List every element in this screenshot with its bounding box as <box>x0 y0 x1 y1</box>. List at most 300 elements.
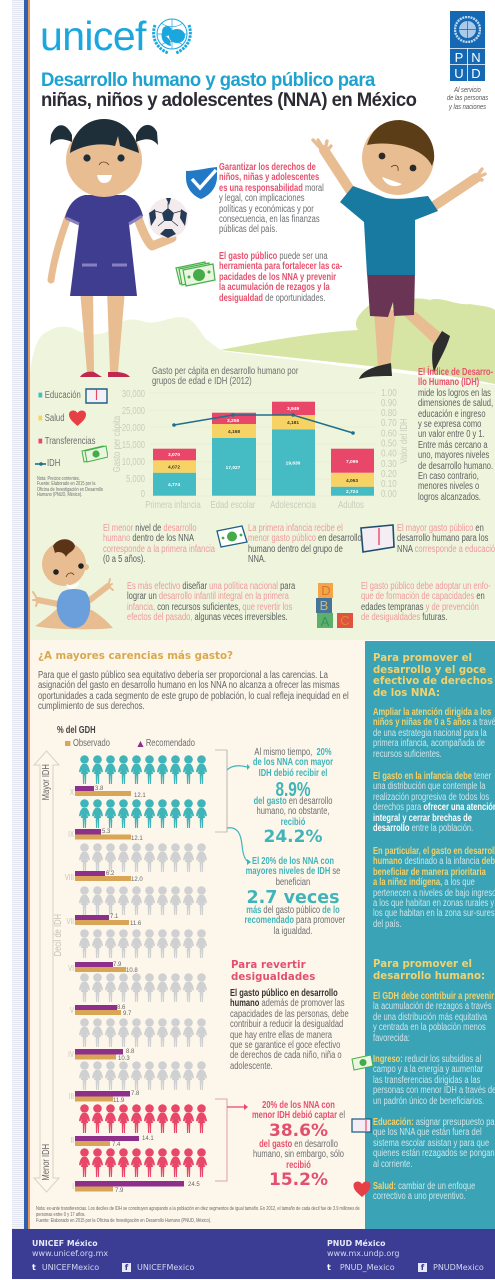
footnote: Nota: ex-ante transferencias. Los deciles de IDH se construyen agrupando a la población en diez segmentos de igual tamaño. En 2012, el tamaño de cada decil fue de 3.9 millones de <box>36 1206 360 1212</box>
text: indice de desarrollo humano: y se expresa como <box>418 419 481 430</box>
footer: unicef contact <box>32 1239 108 1259</box>
blue body <box>57 589 90 628</box>
text: gasto publico: desigualdad de oportunidades. <box>219 293 326 304</box>
callout: 20 percent high idh: IDH debió recibir el <box>259 768 327 779</box>
intro paragraph: oportunidades a cada segmento de este grupo de población, lo cual refleja inequidad en el <box>38 691 349 702</box>
text: gdh debe: favorecida: <box>373 1033 410 1044</box>
legend icon: money <box>81 445 108 463</box>
heading: promover nna <box>373 653 493 700</box>
chart legend: Recomendado <box>146 738 195 749</box>
callout: low idh: menor IDH debió captar el <box>252 1110 345 1121</box>
legend icon: book <box>85 388 108 404</box>
text: enfoque capacidades: edades tempranas y de prevención <box>361 602 479 613</box>
text: ampliar: Ampliar la atención dirigida a los <box>373 707 491 718</box>
bar values: 4,072 <box>168 464 180 470</box>
left axis labels: 0 <box>141 488 145 499</box>
callout text: recibio red: del gasto en desarrollo <box>259 1139 338 1150</box>
dress <box>65 195 143 296</box>
bar values: 24.5 <box>188 1182 200 1188</box>
text: garantizar: políticas y económicas y por <box>219 204 314 215</box>
right axis labels: 0.90 <box>381 397 397 408</box>
text: en particular: pertenecen a niveles de bajo ingreso, <box>373 888 495 899</box>
hair <box>70 119 139 153</box>
text: gdh debe: y centrada en la población menos <box>373 1022 486 1033</box>
left axis labels: 20,000 <box>122 422 145 433</box>
heading: para revertir: Para revertir <box>231 960 306 971</box>
text: ampliar: de una estrategia nacional para la <box>373 728 487 739</box>
category labels: Adultos <box>338 499 364 510</box>
footer: unicef twitter: t UNICEFMexico <box>32 1263 99 1272</box>
left axis labels: 5,000 <box>126 473 145 484</box>
text: politica nacional <box>127 581 296 623</box>
axis label: decil: Decil de IDH <box>53 914 64 956</box>
legs <box>374 310 442 367</box>
bars: adultos <box>331 449 374 496</box>
left axis labels: 25,000 <box>122 405 145 416</box>
callout: 20 percent high idh: Al mismo tiempo, 20% <box>254 747 332 758</box>
text: enfoque capacidades: que de formación de capacidades en <box>361 591 485 602</box>
stat: 15.2: 15.2% <box>269 1170 328 1190</box>
text: para revertir body: capacidades de las personas, debe <box>230 1009 349 1020</box>
right axis labels: 0.20 <box>381 468 397 479</box>
text: menor nivel: humano dentro de los NNA <box>103 533 194 544</box>
people rows <box>79 755 207 1177</box>
red bracket and arrow <box>212 1095 252 1185</box>
shoes <box>80 372 130 377</box>
pnud letters: N <box>471 50 481 65</box>
pnud letters: P <box>455 50 463 65</box>
text: educacion <box>373 1118 495 1170</box>
callout text: recibio red: humano, sin embargo, sólo <box>253 1149 344 1160</box>
baby illustration <box>32 539 114 630</box>
legend icon: heart <box>69 410 86 426</box>
text: enfoque capacidades: de desigualdades futuras. <box>361 612 447 623</box>
text: politica nacional: efectos del pasado, algunas veces irreversibles. <box>127 612 288 623</box>
heading: promover nna: de los NNA: <box>373 688 440 699</box>
icon: heart straddling panel <box>353 1181 371 1197</box>
text: menor nivel: (0 a 5 años). <box>103 554 145 565</box>
right axis labels: 0.50 <box>381 438 397 449</box>
right axis labels: 0.10 <box>381 478 397 489</box>
arms <box>324 150 476 206</box>
decile bars <box>75 786 184 1192</box>
unicef logo <box>40 13 192 59</box>
arms <box>51 212 70 280</box>
legend item: salud: ■ Salud <box>38 413 64 424</box>
text: gdh debe <box>373 992 494 1044</box>
chart note: Fuente: Elaborado en 2015 por la <box>37 481 95 487</box>
text: gdh debe: de una distribución más equitativa <box>373 1012 487 1023</box>
bar values: 10.3 <box>118 1056 130 1062</box>
right axis labels: 0.40 <box>381 448 397 459</box>
bar chart <box>111 387 409 510</box>
footnote <box>36 1207 360 1225</box>
text: en particular: a la niñez indígena, a los que <box>373 877 475 888</box>
text: menor nivel <box>103 523 215 565</box>
chart legend <box>65 738 195 749</box>
right axis labels <box>381 387 397 499</box>
intro paragraph: asignación del gasto en desarrollo humano en los NNA no alcanza a ofrecer las mismas <box>38 680 340 691</box>
text: para revertir body: que hay entre ellas de manera <box>230 1030 332 1041</box>
bar values: 4,063 <box>346 478 358 484</box>
bar values: 12.1 <box>131 836 143 842</box>
legend item: transferencias: ■ Transferencias <box>38 436 95 447</box>
text: salud: Salud: cambiar de un enfoque <box>373 1181 475 1192</box>
text: politica nacional: infancia, con recursos suficientes, que revertir los <box>127 602 292 613</box>
callout: 20 percent beneficio <box>244 857 342 888</box>
undp tagline: Al servicio <box>454 85 481 94</box>
bar values: 17,027 <box>226 465 241 471</box>
text: ingreso: un padrón único de beneficiarios. <box>373 1096 484 1107</box>
text: gasto publico: pacidades de los NNA y prevenir <box>219 272 336 283</box>
text: para revertir body: que se garantice el goce efectivo <box>230 1040 340 1051</box>
boy illustration <box>311 120 487 379</box>
text: indice de desarrollo humano: uno, mayores niveles <box>418 450 489 461</box>
icon: abc blocks <box>316 583 353 629</box>
heading: promover desarrollo: desarrollo humano: <box>373 971 485 982</box>
text: para revertir body: contribuir a reducir la desigualdad <box>230 1019 343 1030</box>
right axis labels: 0.70 <box>381 417 397 428</box>
head <box>66 123 142 197</box>
right axis labels: 1.00 <box>381 387 397 398</box>
chart legend: Observado <box>73 738 110 749</box>
axis label: menor idh: Menor IDH <box>41 1144 52 1180</box>
stat: 24.2: 24.2% <box>264 827 322 847</box>
text: salud: correctivo a uno preventivo. <box>373 1191 466 1202</box>
legend <box>35 388 108 469</box>
bar values: 19,630 <box>286 460 301 466</box>
text: educacion: al corriente. <box>373 1159 412 1170</box>
text: gdh debe: El GDH debe contribuir a prevenir <box>373 991 494 1002</box>
bar values: 5.3 <box>102 829 111 835</box>
idh line <box>172 413 355 435</box>
callout text: recomendado <box>244 906 342 937</box>
text: politica nacional: lograr un desarrollo infantil integral en la primera <box>127 591 289 602</box>
icon: abc blocks: B <box>320 598 328 613</box>
icon: money <box>175 261 216 287</box>
text: ingreso: las transferencias dirigidas a las <box>373 1075 480 1086</box>
text: mayor gasto: El mayor gasto público en <box>397 523 484 534</box>
text: garantizar: públicas del país. <box>219 224 277 235</box>
decile labels: X <box>70 788 74 797</box>
icon: money straddling panel <box>351 1054 373 1071</box>
text: para revertir body <box>230 989 349 1072</box>
text: educacion: que los NNA que están fuera del <box>373 1127 482 1138</box>
category labels <box>145 499 364 510</box>
text: ingreso: Ingreso: reducir los subsidios al <box>373 1054 481 1065</box>
text: garantizar: y legal, con implicaciones <box>219 193 305 204</box>
icon: abc blocks: D <box>321 583 331 598</box>
shirt <box>340 186 438 275</box>
left stripe <box>12 0 24 1229</box>
heading: promover nna: Para promover el <box>373 653 472 664</box>
icon: unicef emblem <box>152 18 192 54</box>
text: para revertir body: humano además de promover las <box>230 998 344 1009</box>
decile labels: II <box>71 1136 74 1145</box>
bar values: 6.2 <box>106 871 115 877</box>
text: indice de desarrollo humano: Entre más cercano a <box>418 440 488 451</box>
legs <box>80 290 125 372</box>
callout text: recibio <box>254 796 332 828</box>
text: menor nivel: El menor nivel de desarrollo <box>103 523 197 534</box>
category labels: Adolescencia <box>270 499 316 510</box>
text: politica nacional: Es más efectivo diseñar una política nacional para <box>127 581 295 592</box>
decile labels: I <box>72 1182 74 1191</box>
footnote: personas entre 0 y 17 años. <box>36 1212 86 1218</box>
text: indice de desarrollo humano: mide los logros en las <box>418 388 491 399</box>
text: para revertir body: de derechos de cada niño, niña o <box>230 1050 342 1061</box>
bar values: 9.7 <box>123 1011 132 1017</box>
text: educacion: quienes están rezagados se pongan <box>373 1148 495 1159</box>
bar values <box>168 406 358 495</box>
decile labels: V <box>70 1006 74 1015</box>
callout: 20 percent high idh: de los NNA con mayor <box>253 757 333 768</box>
chart title: grupos de edad e IDH (2012) <box>152 376 252 387</box>
footer: pnud contact: www.mx.undp.org <box>327 1249 399 1258</box>
right axis labels: 0.30 <box>381 458 397 469</box>
footer: pnud facebook: PNUDMexico <box>433 1263 484 1272</box>
face <box>53 569 59 575</box>
chart note: Humano (PNUD, México). <box>37 492 82 498</box>
undp tagline: de las personas <box>447 93 488 102</box>
callout text: recibio: recibió <box>281 817 305 828</box>
icon: un emblem <box>454 16 481 43</box>
pnud letters: U <box>454 66 464 81</box>
axis titles: Valor del IDH <box>398 418 409 464</box>
text: indice de desarrollo humano: En caso contrario, <box>418 471 479 482</box>
text: gasto infancia: una distribución que contemple la <box>373 781 485 792</box>
text: primera infancia recibe: menor gasto público en desarrollo <box>248 533 362 544</box>
title: niñas, niños y adolescentes (NNA) en México <box>41 90 416 111</box>
heading: para revertir <box>231 960 315 984</box>
bar values: 7.1 <box>110 914 119 920</box>
right axis labels: 0.00 <box>381 488 397 499</box>
text: gasto publico <box>219 251 342 304</box>
text: en particular: a los que habitan en zonas rurales y <box>373 898 494 909</box>
footnote: Fuente: Elaborado en 2015 por la Oficina de Investigación en Desarrollo Humano (PNUD, México). <box>36 1218 211 1224</box>
bar values: 7.8 <box>131 1091 140 1097</box>
icon: book <box>360 524 395 553</box>
icon: shield check <box>186 167 217 199</box>
legs <box>35 608 113 629</box>
bars: adolescencia <box>272 402 315 496</box>
callout: 20 percent beneficio: El 20% de los NNA con <box>252 856 334 867</box>
title <box>41 70 416 111</box>
right axis labels: 0.80 <box>381 407 397 418</box>
bar values: 10.8 <box>126 968 138 974</box>
hair <box>367 120 434 166</box>
text: gasto infancia: desarrollo entre la población. <box>373 823 473 834</box>
decile labels: IV <box>68 1050 74 1059</box>
callout text: recibio: humano, no obstante, <box>257 806 329 817</box>
icon: abc blocks: C <box>340 613 350 628</box>
text: primera infancia recibe: humano dentro del grupo de <box>248 544 343 555</box>
callout: 20 percent beneficio: benefician <box>276 877 310 888</box>
head <box>362 121 434 195</box>
text: primera infancia recibe: NNA. <box>248 554 266 565</box>
text: ingreso: personas con menor IDH a través de <box>373 1085 495 1096</box>
callout: 20 percent beneficio: mayores niveles de IDH se <box>246 866 340 877</box>
category labels: Primera infancia <box>145 499 201 510</box>
bar values: 2,724 <box>346 489 358 495</box>
footer: unicef facebook: UNICEFMexico <box>137 1263 194 1272</box>
chart note: Nota: Precios corrientes. <box>37 476 80 482</box>
text: educacion: sistema escolar asistan y para que <box>373 1138 489 1149</box>
callout text: recomendado: más del gasto público de lo <box>246 905 340 916</box>
heading: promover nna: desarrollo y el goce <box>373 665 486 676</box>
bar values: 4,181 <box>287 420 299 426</box>
bar values: 14.1 <box>142 1136 154 1142</box>
category labels: Edad escolar <box>211 499 255 510</box>
bar values: 3,070 <box>168 452 180 458</box>
left axis labels: 15,000 <box>122 439 145 450</box>
footer: pnud facebook: f <box>421 1263 424 1272</box>
bar values: 11.9 <box>113 1098 125 1104</box>
text: garantizar <box>219 162 324 235</box>
callout text: recibio red <box>250 1140 347 1171</box>
text: gdh debe: la acumulación de rezagos a través <box>373 1001 492 1012</box>
face <box>379 153 385 159</box>
limbs <box>38 586 108 604</box>
legend item: idh: IDH <box>47 458 60 469</box>
panel: teal recommendations <box>365 640 495 1229</box>
shoes <box>359 331 450 379</box>
left axis labels <box>122 388 145 499</box>
text: para revertir body: adolescente. <box>230 1061 273 1072</box>
decile labels <box>65 788 74 1191</box>
text: ampliar <box>373 708 495 760</box>
text: indice de desarrollo humano: menores niveles o <box>418 481 479 492</box>
text: gasto infancia: El gasto en la infancia debe tener <box>373 771 491 782</box>
callout text: recibio: del gasto en desarrollo <box>254 796 332 807</box>
text: ingreso: campo y a la energía y aumentar <box>373 1064 483 1075</box>
left axis labels: 30,000 <box>122 388 145 399</box>
text: indice de desarrollo humano: llo Humano (IDH) <box>418 377 479 388</box>
bar values: 8.6 <box>117 1005 126 1011</box>
text: gasto infancia: derechos para ofrecer una atención <box>373 802 495 813</box>
undp tagline <box>447 85 488 111</box>
text: en particular: beneficiar de manera prioritaria <box>373 867 486 878</box>
text: indice de desarrollo humano: educación e ingreso <box>418 409 486 420</box>
chart title: Gasto per cápita en desarrollo humano por <box>152 366 298 377</box>
decile labels: IX <box>68 830 74 839</box>
bar values: 4,774 <box>168 482 180 488</box>
unicef logo: unicef <box>40 13 146 59</box>
callout text: recomendado: la igualdad. <box>274 926 312 937</box>
decile labels: III <box>69 1092 74 1101</box>
text: garantizar: niños, niñas y adolescentes <box>219 172 319 183</box>
bars: primera infancia <box>153 449 196 496</box>
text: en particular <box>373 847 495 930</box>
decile labels: VII <box>66 917 74 926</box>
callout: low idh: 20% de los NNA con <box>262 1100 335 1111</box>
decile labels: VIII <box>65 873 74 882</box>
undp logo <box>450 11 485 81</box>
bars: edad escolar <box>212 413 256 496</box>
chart heading: percent: % del GDH <box>57 725 96 736</box>
text: indice de desarrollo humano: dimensiones de salud, <box>418 398 493 409</box>
text: gasto infancia <box>373 772 495 834</box>
icon: soccer ball <box>148 198 188 238</box>
text: enfoque capacidades <box>361 581 491 623</box>
text: gasto publico: la acumulación de rezagos y la <box>219 282 330 293</box>
text: indice de desarrollo humano: de desarrollo humano. <box>418 461 493 472</box>
chart note: Oficina de Investigación en Desarrollo <box>37 487 103 493</box>
axis label: mayor idh: Mayor IDH <box>41 764 52 800</box>
bar values <box>95 786 200 1194</box>
text: gasto publico: herramienta para fortalecer las ca- <box>219 261 342 272</box>
text: indice de desarrollo humano: El Índice de Desarro- <box>418 367 493 378</box>
bar values: 7.4 <box>112 1142 121 1148</box>
icon: abc blocks: A <box>321 614 330 629</box>
footer <box>12 1229 495 1279</box>
footer: unicef contact: www.unicef.org.mx <box>32 1249 108 1258</box>
footer: unicef contact: UNICEF México <box>32 1239 98 1248</box>
bar values: 4,168 <box>228 429 240 435</box>
text: salud <box>373 1182 475 1203</box>
stat: 38.6: 38.6% <box>269 1121 328 1141</box>
decile labels: VI <box>68 964 74 973</box>
text: gasto publico: El gasto público puede ser una <box>219 251 328 262</box>
bar values: 12.1 <box>134 793 146 799</box>
bar values: 8.8 <box>126 1049 135 1055</box>
pnud letters: D <box>471 66 481 81</box>
bar values: 7.9 <box>115 1188 124 1194</box>
legend item: educacion: ■ Educación <box>38 390 81 401</box>
callout: low idh <box>250 1101 347 1122</box>
text: para revertir body: El gasto público en desarrollo <box>230 988 338 999</box>
intro paragraph: cumplimiento de sus derechos. <box>38 701 145 712</box>
right axis labels: 0.60 <box>381 428 397 439</box>
text: menor nivel: corresponde a la primera infancia <box>103 544 215 555</box>
text: ampliar: primera infancia, acompañada de <box>373 738 485 749</box>
callout text: recomendado: recomendado para promover <box>244 915 345 926</box>
icon: money small <box>216 525 248 548</box>
bar values: 3,258 <box>227 418 239 424</box>
text: primera infancia recibe <box>248 523 362 565</box>
text: gasto infancia: integral y cerrar brechas de <box>373 813 472 824</box>
text: primera infancia recibe: La primera infancia recibe el <box>248 523 343 534</box>
blue and orange vertical bands <box>24 0 30 1229</box>
heading: promover nna: efectivo de derechos <box>373 676 493 687</box>
left axis labels: 10,000 <box>122 456 145 467</box>
bar values: 7,099 <box>346 459 358 465</box>
footer: unicef facebook: f <box>125 1263 128 1272</box>
pnud letters <box>450 48 485 81</box>
footer: pnud contact <box>327 1239 399 1259</box>
callout text: recibio red: recibió <box>286 1160 311 1171</box>
pictogram chart <box>64 755 207 1194</box>
text: ampliar: recursos suficientes. <box>373 749 442 760</box>
text: garantizar: consecuencia, en las finanzas <box>219 214 320 225</box>
callout: 20 percent high idh <box>253 747 333 779</box>
bar values: 12.0 <box>131 877 143 883</box>
title: Desarrollo humano y gasto público para <box>41 70 375 91</box>
bar values: 7.9 <box>113 962 122 968</box>
heading: promover desarrollo: Para promover el <box>373 959 472 970</box>
stat: 2.7 veces: 2.7 veces <box>246 888 340 908</box>
icon: book straddling panel <box>351 1117 372 1134</box>
hair <box>53 539 75 557</box>
text: ingreso <box>373 1055 495 1107</box>
axis titles <box>111 416 409 472</box>
head <box>42 542 86 586</box>
axis arrow <box>33 750 60 1192</box>
chart title <box>152 366 298 387</box>
undp tagline: y las naciones <box>449 102 486 111</box>
text: gasto infancia: realización progresiva de todos los <box>373 792 489 803</box>
text: mayor gasto <box>397 523 495 555</box>
